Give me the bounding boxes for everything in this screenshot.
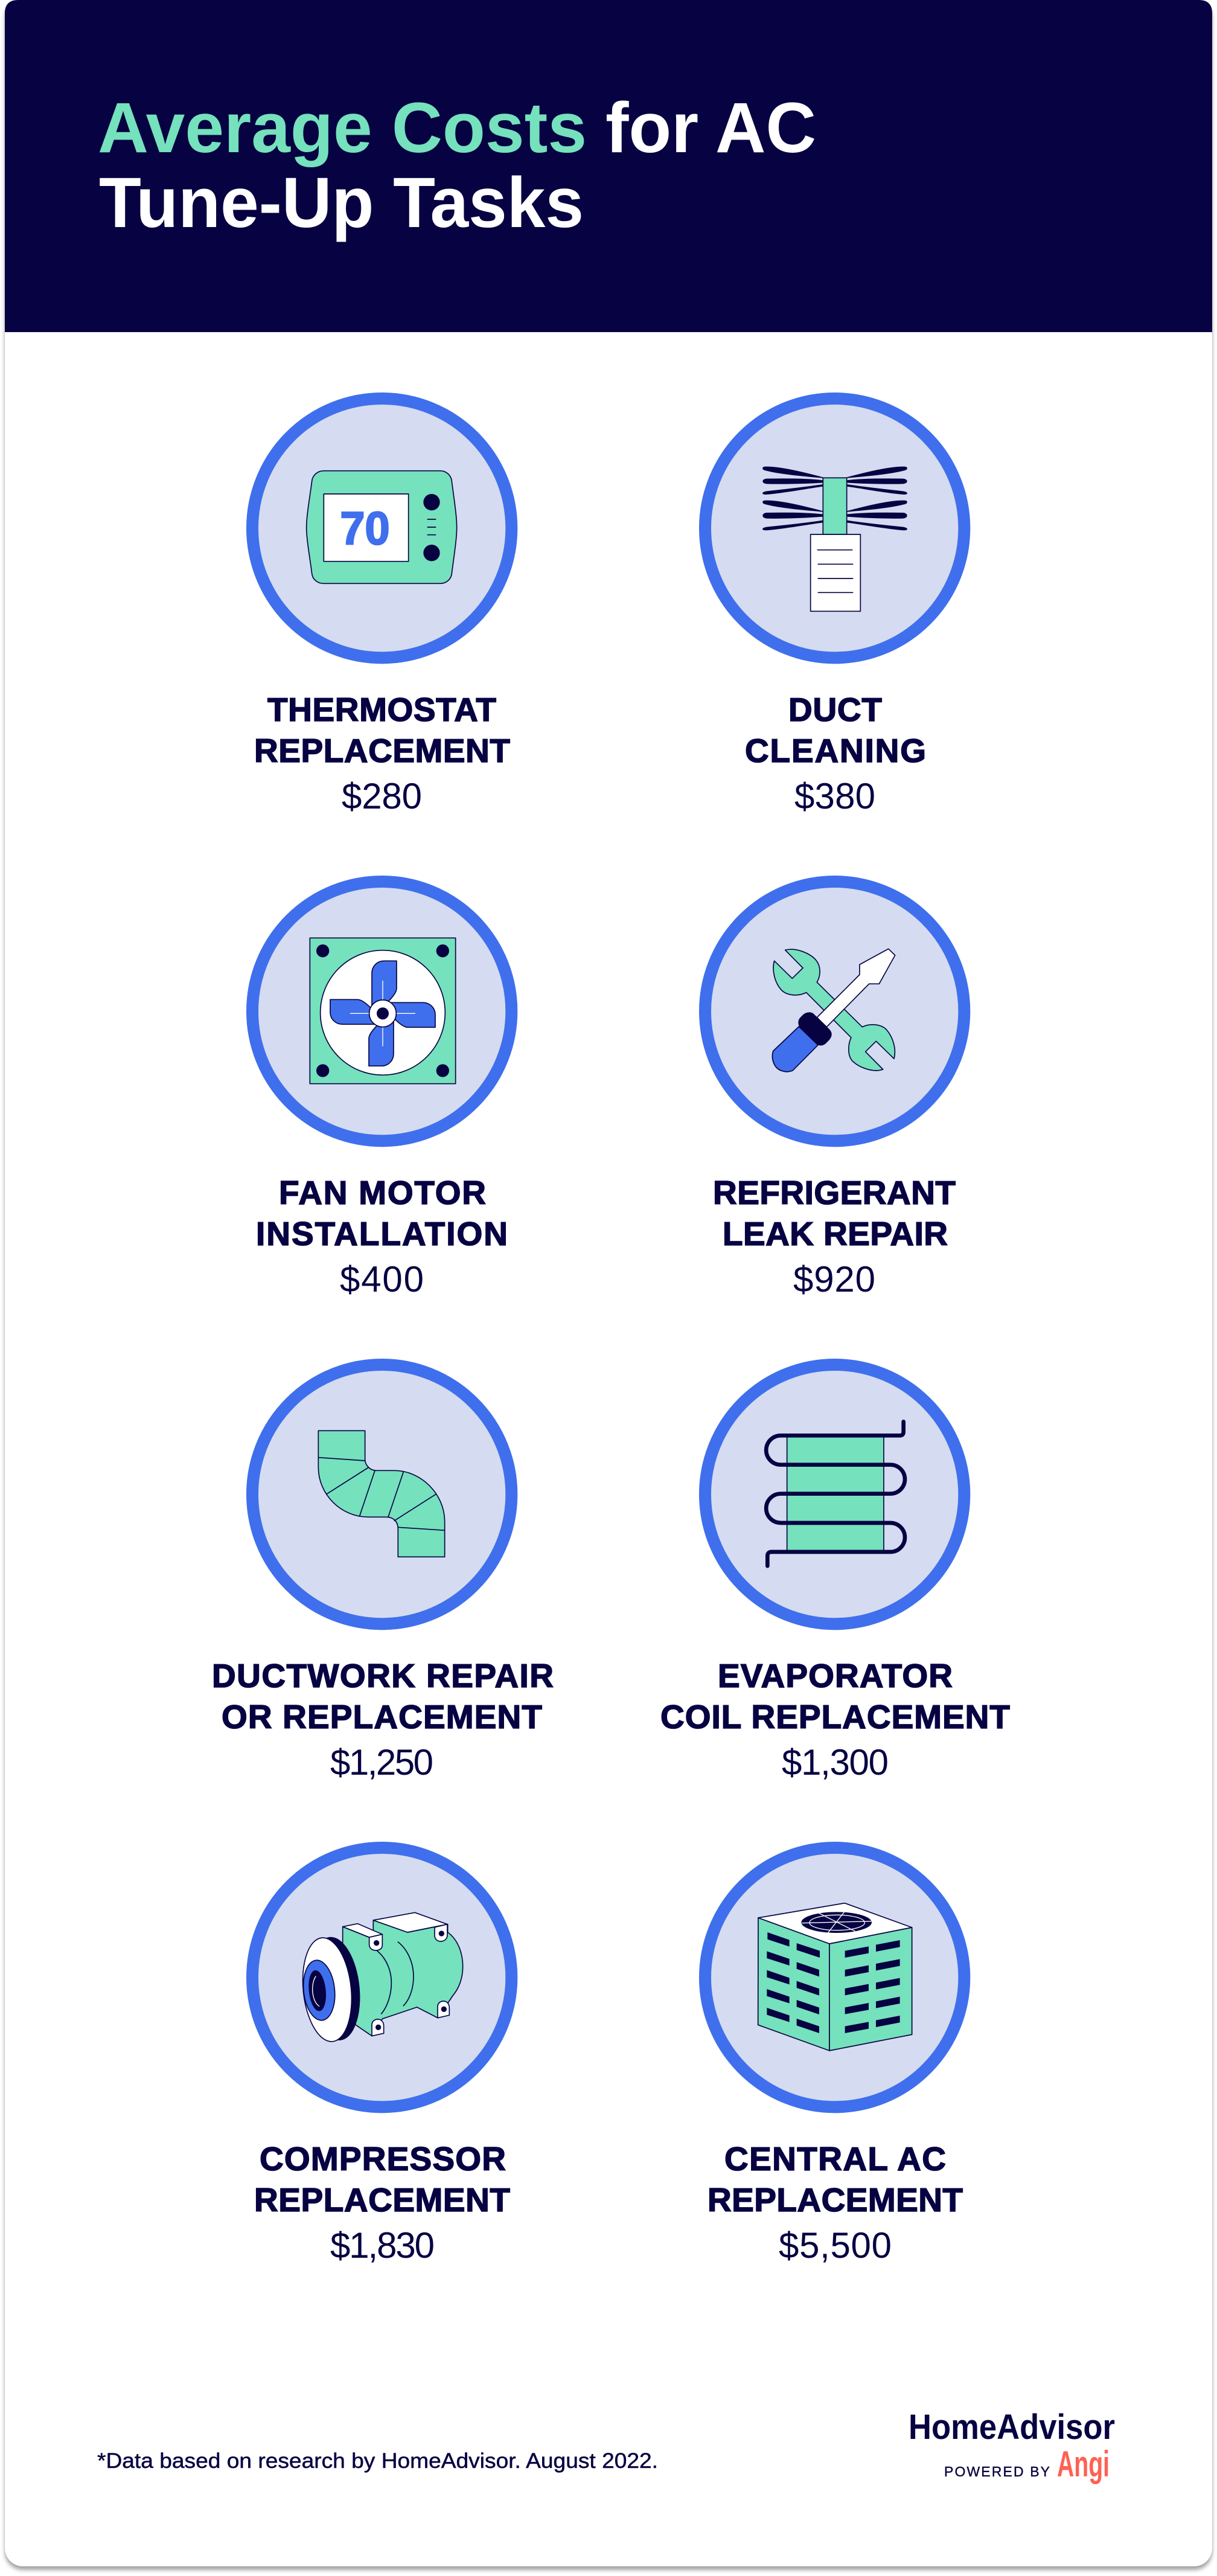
label: central AC replacement: CENTRAL AC xyxy=(724,2140,946,2177)
label: ductwork repair or replacement xyxy=(212,1657,554,1735)
panel: central AC replacement xyxy=(705,1848,964,2266)
price: $380: $380 xyxy=(794,776,875,816)
label: compressor replacement: COMPRESSOR xyxy=(260,2140,506,2177)
price: $1,830: $1,830 xyxy=(330,2225,435,2266)
footnote: *Data based on research by HomeAdvisor. August 2022. xyxy=(97,2449,658,2473)
icon: wrench and screwdriver xyxy=(705,882,964,1141)
label: thermostat replacement: THERMOSTAT xyxy=(267,691,496,728)
label: fan motor installation: INSTALLATION xyxy=(256,1215,508,1252)
logo: HomeAdvisor powered by Angi: POWERED BY xyxy=(944,2464,1050,2479)
label: duct cleaning: DUCT xyxy=(788,691,882,728)
icon: evaporator coil xyxy=(705,1365,964,1624)
label: evaporator coil replacement: EVAPORATOR xyxy=(718,1657,953,1694)
icon: AC unit xyxy=(705,1848,964,2107)
panel: evaporator coil replacement xyxy=(660,1365,1010,1783)
label: duct cleaning xyxy=(745,691,926,769)
label: refrigerant leak repair: LEAK REPAIR xyxy=(723,1215,948,1252)
title: Tune-Up Tasks xyxy=(99,163,584,243)
label: central AC replacement xyxy=(708,2140,963,2219)
title xyxy=(98,88,816,243)
label: thermostat replacement: REPLACEMENT xyxy=(254,732,510,769)
price: $5,500: $5,500 xyxy=(779,2225,892,2266)
label: evaporator coil replacement xyxy=(660,1657,1010,1735)
icon: thermostat: 70 xyxy=(340,503,390,554)
label: refrigerant leak repair xyxy=(713,1174,956,1252)
price: $1,300: $1,300 xyxy=(782,1742,889,1783)
label: ductwork repair or replacement: OR REPLACEMENT xyxy=(222,1698,542,1735)
price: $920: $920 xyxy=(793,1259,875,1299)
panel: ductwork repair or replacement xyxy=(212,1365,554,1783)
label: evaporator coil replacement: COIL REPLACEMENT xyxy=(660,1698,1010,1735)
panel: duct cleaning xyxy=(705,399,964,816)
header banner xyxy=(5,0,1212,332)
label: refrigerant leak repair: REFRIGERANT xyxy=(713,1174,956,1211)
panel: thermostat replacement xyxy=(252,399,511,816)
label: fan motor installation xyxy=(256,1174,508,1252)
icon: ductwork xyxy=(252,1365,511,1624)
label: fan motor installation: FAN MOTOR xyxy=(279,1174,486,1211)
logo: HomeAdvisor powered by Angi xyxy=(909,2408,1115,2484)
logo: HomeAdvisor powered by Angi: HomeAdvisor xyxy=(909,2408,1115,2447)
panel: compressor replacement xyxy=(252,1848,511,2266)
label: central AC replacement: REPLACEMENT xyxy=(708,2181,963,2219)
price: $1,250: $1,250 xyxy=(330,1742,433,1783)
label: thermostat replacement xyxy=(254,691,510,769)
panel: refrigerant leak repair xyxy=(705,882,964,1299)
label: ductwork repair or replacement: DUCTWORK REPAIR xyxy=(212,1657,554,1694)
price: $400: $400 xyxy=(340,1259,424,1299)
title: for AC xyxy=(605,88,816,168)
label: compressor replacement: REPLACEMENT xyxy=(254,2181,510,2219)
logo: HomeAdvisor powered by Angi: Angi xyxy=(1057,2444,1110,2484)
icon: thermostat xyxy=(252,399,511,658)
panel: fan motor installation xyxy=(252,882,511,1299)
icon: fan xyxy=(252,882,511,1141)
icon: duct brush xyxy=(705,399,964,658)
label: duct cleaning: CLEANING xyxy=(745,732,926,769)
title: Average Costs xyxy=(98,88,587,168)
icon: compressor xyxy=(252,1848,511,2107)
price: $280: $280 xyxy=(342,776,422,816)
label: compressor replacement xyxy=(254,2140,510,2219)
